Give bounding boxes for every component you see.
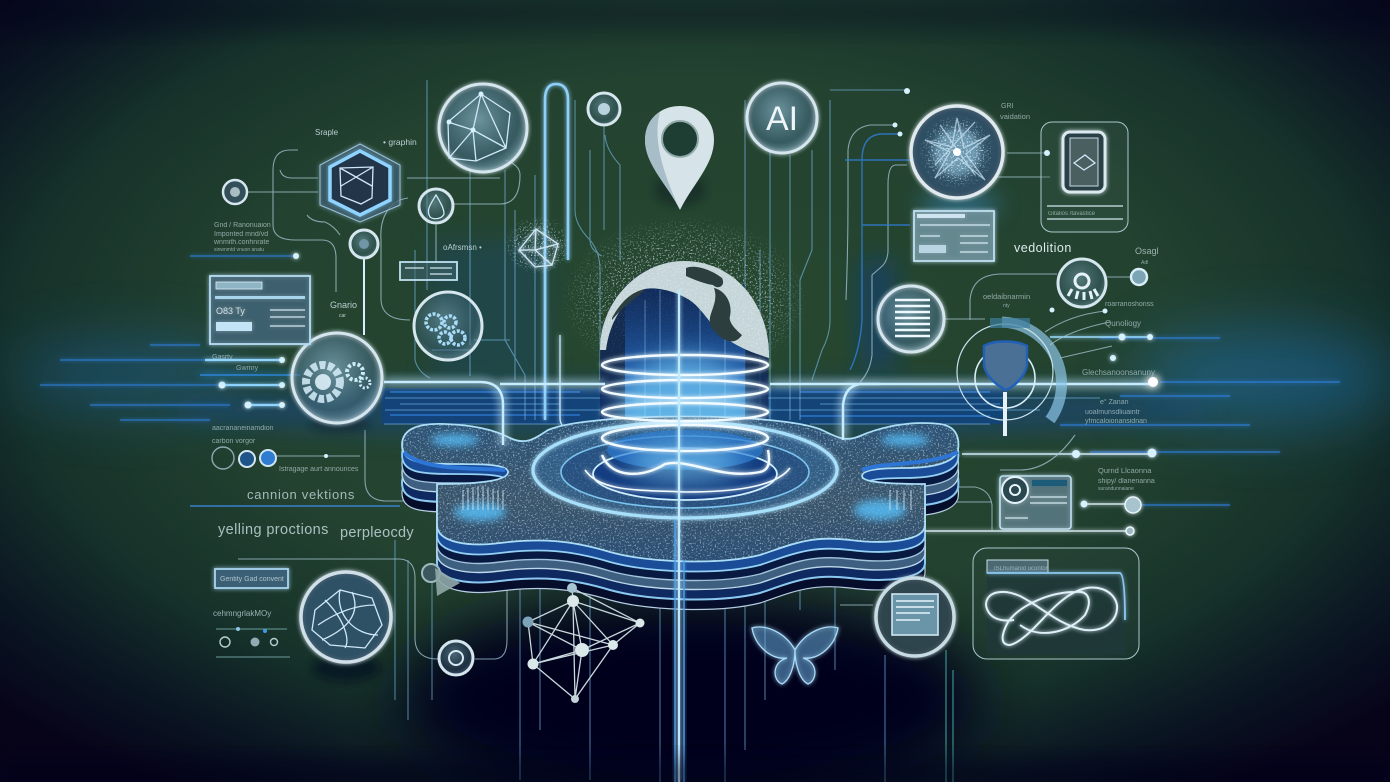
hexagon icon bbox=[320, 144, 400, 222]
left light streaks bbox=[40, 253, 299, 420]
small labels: sinwnmtd vnuon anatu bbox=[214, 247, 264, 253]
right bottom nodes bbox=[925, 497, 1141, 535]
small labels: Gwmry bbox=[236, 365, 259, 372]
left interface panel bbox=[210, 276, 310, 344]
globe bbox=[600, 261, 769, 358]
tall capsule conduit bbox=[545, 84, 575, 431]
network graph bbox=[522, 583, 644, 703]
small labels: aacrananeinamdion bbox=[212, 425, 274, 432]
small labels: oAfrsmsn • bbox=[443, 243, 482, 252]
bottom left small icons bbox=[216, 627, 290, 657]
small labels: Imponted mnd/vd bbox=[214, 231, 268, 238]
small circle row left bbox=[212, 447, 328, 469]
small labels bbox=[212, 103, 1159, 618]
holographic rings bbox=[585, 355, 790, 492]
small labels: wnmith.conhnrate bbox=[213, 239, 269, 246]
network lens bbox=[301, 572, 391, 682]
small labels: Qunoliogy bbox=[1105, 319, 1141, 328]
headings: yelling proctions bbox=[218, 522, 329, 538]
small labels: surandunnaiane bbox=[1098, 486, 1134, 492]
left interface panel: O83 Ty bbox=[216, 306, 245, 316]
target lens bbox=[1058, 259, 1130, 307]
main horizontal bus bbox=[200, 375, 1158, 445]
infinity panel bbox=[973, 548, 1139, 659]
gears lens bbox=[414, 292, 482, 360]
location arrow icon bbox=[422, 564, 460, 596]
small labels: oeldaibnarmin bbox=[983, 292, 1030, 301]
map pin bbox=[645, 106, 714, 210]
phone panel bbox=[1041, 122, 1128, 232]
small lens top bbox=[588, 93, 620, 125]
document lens bbox=[878, 286, 944, 352]
small labels: roarranoshonss bbox=[1105, 301, 1154, 308]
right light streaks bbox=[962, 334, 1340, 505]
headings: cannion vektions bbox=[247, 487, 355, 502]
headings: vedolition bbox=[1014, 241, 1072, 255]
small labels: cehmngrlakMOy bbox=[213, 609, 271, 618]
bottom right card bbox=[1000, 476, 1071, 529]
small labels: • graphin bbox=[383, 137, 417, 147]
AI lens bbox=[747, 83, 817, 153]
small labels: Sraple bbox=[315, 128, 339, 137]
node circle right bbox=[1131, 269, 1147, 285]
small labels: shipy/ dlanenanna bbox=[1098, 478, 1155, 485]
small circle node left bbox=[223, 180, 247, 204]
sparkle crystal bbox=[504, 215, 572, 275]
butterfly bbox=[752, 627, 838, 684]
small labels: Istragage aurt announces bbox=[279, 466, 359, 473]
small labels: car bbox=[339, 313, 346, 319]
star lens bbox=[911, 106, 1003, 198]
small labels: Adl bbox=[1141, 260, 1148, 266]
phone panel: Gitalios /tavastice bbox=[1048, 211, 1096, 217]
platform bbox=[402, 416, 958, 609]
small label panel bbox=[400, 262, 457, 280]
headings: perpleocdy bbox=[340, 525, 414, 541]
bottom left pill panel bbox=[215, 569, 288, 588]
small labels: Qurnd Llcaonna bbox=[1098, 466, 1152, 475]
small labels: Gnario bbox=[330, 300, 357, 310]
small labels: nty bbox=[1003, 303, 1010, 309]
small labels: carbon vorgor bbox=[212, 438, 256, 445]
shield dial bbox=[957, 308, 1112, 436]
small labels: Osagl bbox=[1135, 246, 1159, 256]
small labels: Gnd / Ranonuaion bbox=[214, 222, 271, 229]
polygon lens bbox=[439, 84, 527, 172]
AI lens: AI bbox=[766, 100, 798, 138]
bottom right document lens bbox=[876, 578, 954, 656]
teardrop lens bbox=[419, 189, 453, 223]
small labels: e° Zanan bbox=[1100, 398, 1129, 406]
small bottom lens bbox=[439, 641, 473, 675]
small labels: GRI bbox=[1001, 103, 1014, 110]
bottom left pill panel: Gentity Gad convent bbox=[220, 576, 284, 583]
dust particles bbox=[559, 215, 809, 385]
small lens bbox=[350, 230, 378, 258]
small labels: Gasrty bbox=[212, 354, 233, 361]
horizontal circuit band bbox=[382, 388, 1100, 424]
blue energy column bbox=[600, 261, 768, 495]
small labels: yfmcaloionansidnan bbox=[1085, 418, 1147, 425]
headings bbox=[218, 241, 1072, 541]
small labels: Glechsanoonsanuny bbox=[1082, 368, 1155, 377]
central vertical beam bbox=[675, 290, 684, 782]
small labels: vaidation bbox=[1000, 112, 1030, 121]
platform central dish bbox=[533, 422, 837, 518]
small labels: uoalmunsdliuaintr bbox=[1085, 409, 1141, 416]
connector lines bbox=[190, 80, 1075, 782]
document panel bbox=[914, 211, 994, 261]
infinity panel: ISLhumanid ucontor bbox=[994, 566, 1048, 572]
gear lens large bbox=[292, 333, 382, 432]
